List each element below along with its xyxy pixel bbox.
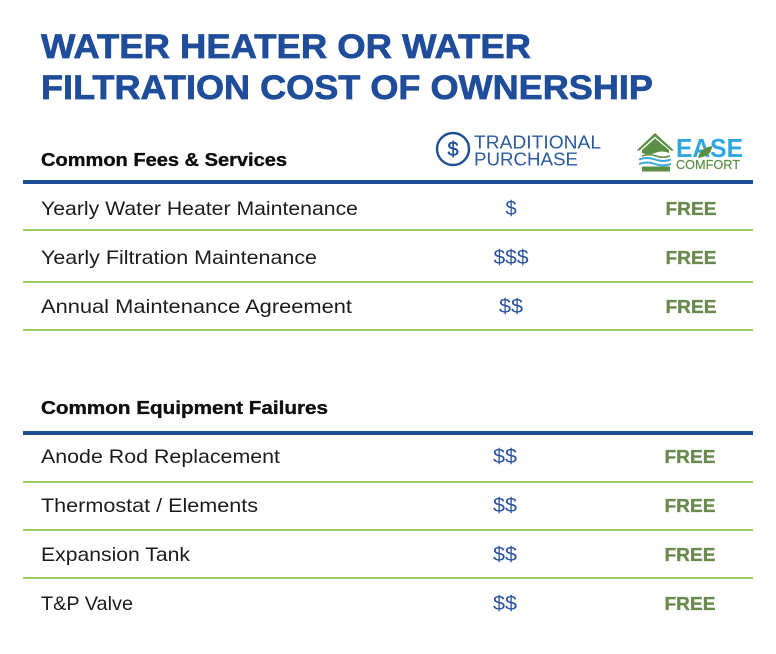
icon: dollar circle (437, 133, 469, 165)
divider: header fees (23, 180, 753, 184)
row: yearly water heater maintenance: FREE (666, 198, 716, 219)
row: t&p valve: T&P Valve (41, 593, 133, 615)
row: thermostat elements: $$ (493, 495, 517, 517)
row: thermostat elements: Thermostat / Elements (41, 495, 258, 517)
row: annual maintenance agreement (41, 296, 716, 318)
row: yearly water heater maintenance: Yearly Water Heater Maintenance (41, 198, 358, 220)
row: yearly filtration maintenance: Yearly Filtration Maintenance (41, 247, 317, 269)
row: yearly filtration maintenance: FREE (666, 247, 716, 268)
icon: dollar circle: $ (447, 139, 459, 161)
row: anode rod replacement: Anode Rod Replacement (41, 446, 281, 468)
row: expansion tank: FREE (664, 544, 716, 565)
logo: ease comfort: COMFORT (676, 158, 740, 172)
column heading: traditional purchase: PURCHASE (474, 150, 578, 170)
row: anode rod replacement: $$ (493, 446, 517, 468)
heading: common equipment failures: Common Equipment Failures (41, 398, 328, 418)
row: yearly water heater maintenance: $ (505, 198, 517, 220)
row: expansion tank: $$ (493, 544, 517, 566)
row: anode rod replacement (41, 446, 716, 468)
row: yearly filtration maintenance: $$$ (494, 247, 528, 269)
column heading: traditional purchase (474, 132, 601, 170)
row: expansion tank: Expansion Tank (41, 544, 190, 566)
row: t&p valve (41, 593, 716, 615)
title: FILTRATION COST OF OWNERSHIP (41, 69, 653, 107)
row: yearly filtration maintenance (41, 247, 716, 269)
row: thermostat elements (41, 495, 716, 517)
divider: header failures (23, 431, 753, 435)
row: expansion tank (41, 544, 716, 566)
row: t&p valve: $$ (493, 593, 517, 615)
heading: common fees and services: Common Fees & Services (41, 150, 287, 170)
title: WATER HEATER OR WATER (41, 28, 531, 66)
row: annual maintenance agreement: $$ (499, 296, 523, 318)
title (41, 28, 653, 107)
column heading: traditional purchase: TRADITIONAL (474, 132, 601, 152)
logo: ease comfort (636, 133, 743, 172)
row: thermostat elements: FREE (664, 495, 716, 516)
row: annual maintenance agreement: Annual Maintenance Agreement (41, 296, 353, 318)
logo: ease comfort: EASE (676, 133, 743, 163)
row: t&p valve: FREE (664, 593, 716, 614)
row: anode rod replacement: FREE (664, 446, 716, 467)
row: annual maintenance agreement: FREE (666, 296, 716, 317)
row: yearly water heater maintenance (41, 198, 716, 220)
